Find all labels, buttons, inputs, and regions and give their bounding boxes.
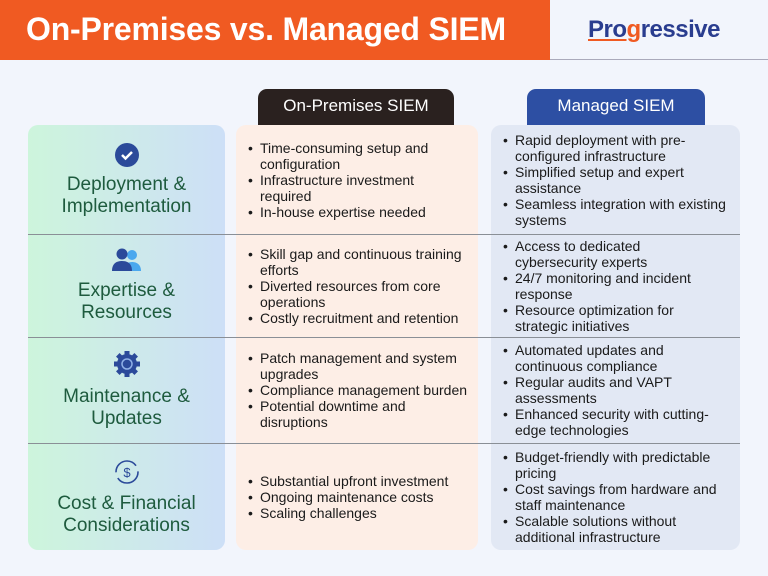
on-prem expertise bbox=[248, 246, 462, 326]
managed deployment bbox=[504, 132, 726, 228]
managed maintenance: Enhanced security with cutting- bbox=[515, 406, 709, 422]
column header: managed bbox=[527, 89, 705, 125]
managed expertise bbox=[504, 238, 691, 334]
on-prem deployment: Time-consuming setup and bbox=[260, 140, 428, 156]
column header: on-premises bbox=[258, 89, 454, 125]
category: deployment bbox=[62, 143, 191, 216]
managed expertise: cybersecurity experts bbox=[515, 254, 647, 270]
category: maintenance: Updates bbox=[91, 408, 162, 429]
managed maintenance: Automated updates and bbox=[515, 342, 664, 358]
category: cost: Cost & Financial bbox=[57, 492, 196, 514]
managed cost: Cost savings from hardware and bbox=[515, 480, 717, 496]
managed deployment: Simplified setup and expert bbox=[515, 164, 684, 180]
managed maintenance: Regular audits and VAPT bbox=[515, 374, 672, 390]
category: maintenance bbox=[63, 351, 190, 429]
managed maintenance: edge technologies bbox=[515, 422, 629, 438]
category: expertise: Expertise & bbox=[78, 280, 175, 300]
title bbox=[0, 0, 550, 60]
column header: on-premises: On-Premises SIEM bbox=[283, 96, 429, 115]
on-prem expertise: efforts bbox=[260, 262, 299, 278]
on-prem maintenance bbox=[248, 350, 467, 430]
on-prem expertise: operations bbox=[260, 294, 325, 310]
on-prem maintenance: disruptions bbox=[260, 414, 328, 430]
managed deployment: Seamless integration with existing bbox=[515, 196, 726, 212]
managed cost: Budget-friendly with predictable bbox=[515, 448, 710, 464]
title: On-Premises vs. Managed SIEM bbox=[26, 11, 506, 47]
managed cost: pricing bbox=[515, 464, 556, 480]
category: deployment: Implementation bbox=[62, 196, 191, 216]
on-prem deployment: configuration bbox=[260, 156, 340, 172]
on-prem maintenance: Potential downtime and bbox=[260, 398, 406, 414]
panel: on-premises bbox=[236, 125, 478, 550]
managed expertise: strategic initiatives bbox=[515, 318, 629, 334]
category: cost: Considerations bbox=[63, 514, 190, 536]
category: expertise bbox=[78, 248, 175, 322]
managed cost bbox=[504, 448, 717, 544]
on-prem cost: Scaling challenges bbox=[260, 504, 377, 520]
panel: managed bbox=[491, 125, 740, 550]
managed deployment: Rapid deployment with pre- bbox=[515, 132, 685, 148]
on-prem cost: Substantial upfront investment bbox=[260, 472, 448, 488]
category: cost bbox=[57, 460, 196, 536]
on-prem deployment: In-house expertise needed bbox=[260, 204, 426, 220]
managed deployment: assistance bbox=[515, 180, 581, 196]
managed cost: additional infrastructure bbox=[515, 528, 661, 544]
managed cost: Scalable solutions without bbox=[515, 512, 676, 528]
on-prem expertise: Diverted resources from core bbox=[260, 278, 441, 294]
on-prem maintenance: upgrades bbox=[260, 366, 318, 382]
on-prem deployment: Infrastructure investment bbox=[260, 172, 414, 188]
column header: managed: Managed SIEM bbox=[557, 96, 675, 115]
on-prem deployment: required bbox=[260, 188, 311, 204]
managed cost: staff maintenance bbox=[515, 496, 625, 512]
managed maintenance: continuous compliance bbox=[515, 358, 657, 374]
managed expertise: response bbox=[515, 286, 573, 302]
category: expertise: Resources bbox=[81, 302, 172, 322]
logo: Progressive bbox=[588, 16, 720, 43]
on-prem maintenance: Patch management and system bbox=[260, 350, 457, 366]
on-prem cost: Ongoing maintenance costs bbox=[260, 488, 434, 504]
on-prem expertise: Costly recruitment and retention bbox=[260, 310, 458, 326]
on-prem cost bbox=[248, 472, 448, 521]
panel: categories bbox=[28, 125, 225, 550]
category: cost: $ bbox=[123, 464, 131, 480]
managed maintenance bbox=[504, 342, 709, 438]
category: maintenance: Maintenance & bbox=[63, 386, 190, 407]
managed expertise: 24/7 monitoring and incident bbox=[515, 270, 691, 286]
category: deployment: Deployment & bbox=[67, 174, 186, 194]
managed deployment: systems bbox=[515, 212, 566, 228]
on-prem expertise: Skill gap and continuous training bbox=[260, 246, 462, 262]
managed maintenance: assessments bbox=[515, 390, 597, 406]
managed deployment: configured infrastructure bbox=[515, 148, 666, 164]
on-prem maintenance: Compliance management burden bbox=[260, 382, 467, 398]
managed expertise: Resource optimization for bbox=[515, 302, 674, 318]
on-prem deployment bbox=[248, 140, 428, 220]
managed expertise: Access to dedicated bbox=[515, 238, 640, 254]
